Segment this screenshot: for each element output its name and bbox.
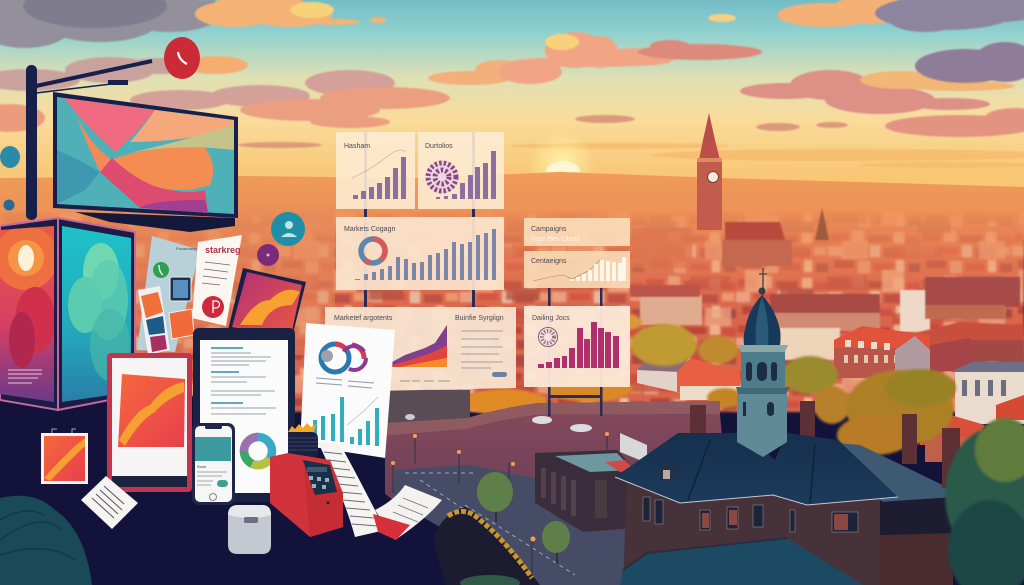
- autumn trees: [463, 313, 956, 455]
- big right tree: [945, 418, 1024, 585]
- small clouds: [238, 115, 848, 148]
- panel: Durtolios chart: Durtolios: [425, 143, 453, 150]
- curved wall and road: [385, 401, 735, 585]
- large city buildings: [630, 208, 1024, 362]
- billboard post with phone icon: [26, 37, 200, 220]
- distant hills: [0, 172, 1024, 240]
- mid city buildings: [637, 326, 1024, 462]
- kiosk left face: [0, 218, 58, 410]
- white flyer: [192, 235, 242, 326]
- panel: Centaeigns sparkline: Centaeigns: [531, 258, 567, 265]
- dashboard panel posts: [364, 132, 602, 416]
- big clock tower: [697, 113, 722, 230]
- white flyer: starkreg: [205, 245, 241, 255]
- side dots: [0, 146, 20, 210]
- panel: Markets campaign chart: [336, 217, 504, 290]
- cloud: mid left mauve: [0, 57, 198, 91]
- small art card: [41, 429, 88, 484]
- cloud: right pink: [740, 70, 990, 114]
- street trees: [477, 472, 570, 564]
- back wing of building: [880, 497, 953, 585]
- panel: Marketing arguments with area chart: [325, 307, 516, 392]
- tablet behind: [228, 268, 306, 345]
- panel: Dailing jocs chart: Dailing Jocs: [532, 315, 570, 322]
- icon: person badge: [271, 212, 305, 246]
- curled receipt: [373, 485, 442, 540]
- panel: Hasham chart: [336, 132, 415, 209]
- city haze: [0, 205, 1024, 315]
- grey back roof: [838, 443, 953, 503]
- sky background: [0, 0, 1024, 215]
- left haze behind devices: [135, 205, 335, 355]
- white speaker box: [228, 505, 271, 554]
- phone with donut: Sooe: [197, 464, 207, 469]
- cloud: top right: [777, 0, 910, 27]
- panel: Hasham chart: Hasham: [344, 143, 370, 150]
- panel: Campaigns heading: [524, 218, 630, 246]
- printed brochures and phone: [137, 235, 306, 355]
- sky streaks: [510, 143, 1024, 168]
- donut chart: [244, 437, 272, 465]
- chimneys: [690, 401, 960, 488]
- main brick building: [623, 480, 880, 585]
- small phone: [138, 286, 170, 355]
- cloud: top left orange: [195, 0, 386, 27]
- panel: Dailing jocs chart: [524, 306, 630, 387]
- report with donut and bars: [300, 323, 395, 458]
- panel: Centaeigns sparkline: [524, 251, 630, 288]
- note page: [81, 476, 138, 529]
- panel: Durtolios chart: [418, 132, 504, 209]
- far bridge scene: [385, 390, 470, 430]
- panel: Campaigns heading: Hige Bes Litatia: [531, 236, 580, 243]
- billboard screen: [53, 92, 238, 232]
- red card machine: [270, 453, 343, 537]
- blue brochure: [137, 236, 200, 352]
- red tablet: [107, 353, 192, 492]
- kiosk display: [0, 218, 135, 410]
- lower front roof: [620, 538, 863, 585]
- cloud: top left dark: [23, 0, 167, 28]
- phone with donut: [192, 423, 272, 505]
- kiosk right face: [58, 218, 135, 410]
- panel: Marketing arguments with area chart: Marketef argotents: [334, 315, 393, 322]
- low flat building: [535, 433, 647, 532]
- grey street: [393, 465, 650, 585]
- cloud: centre: [498, 32, 680, 84]
- panel: Marketing arguments with area chart: Buinfie Syrgiign: [455, 315, 504, 322]
- dark tablet with document: [193, 328, 295, 502]
- city texture: [0, 212, 1024, 412]
- main dark roof: [615, 433, 898, 505]
- photo card: [169, 309, 194, 339]
- icon: phone circle: [164, 37, 200, 79]
- teal fan plant: [0, 496, 92, 585]
- coin stack: [288, 423, 318, 458]
- dark foreground ground: [0, 395, 450, 585]
- panel: Markets campaign chart: Markets Cogagn: [344, 226, 395, 233]
- bell tower: [736, 268, 790, 457]
- sun: [528, 131, 596, 199]
- cloud: top left grey: [0, 0, 220, 48]
- cloud: low centre salmon: [130, 70, 395, 110]
- clouds: [0, 0, 1024, 168]
- billboard stand: [75, 212, 235, 232]
- yellow topped bush: [433, 507, 540, 585]
- blue brochure: Pozanowag: [176, 246, 197, 251]
- paper scroll: [318, 442, 385, 537]
- cloud: low right: [885, 108, 1024, 137]
- icon: purple dot: [257, 244, 279, 266]
- panel: Campaigns heading: Campaigns: [531, 226, 567, 233]
- cars: [405, 414, 592, 432]
